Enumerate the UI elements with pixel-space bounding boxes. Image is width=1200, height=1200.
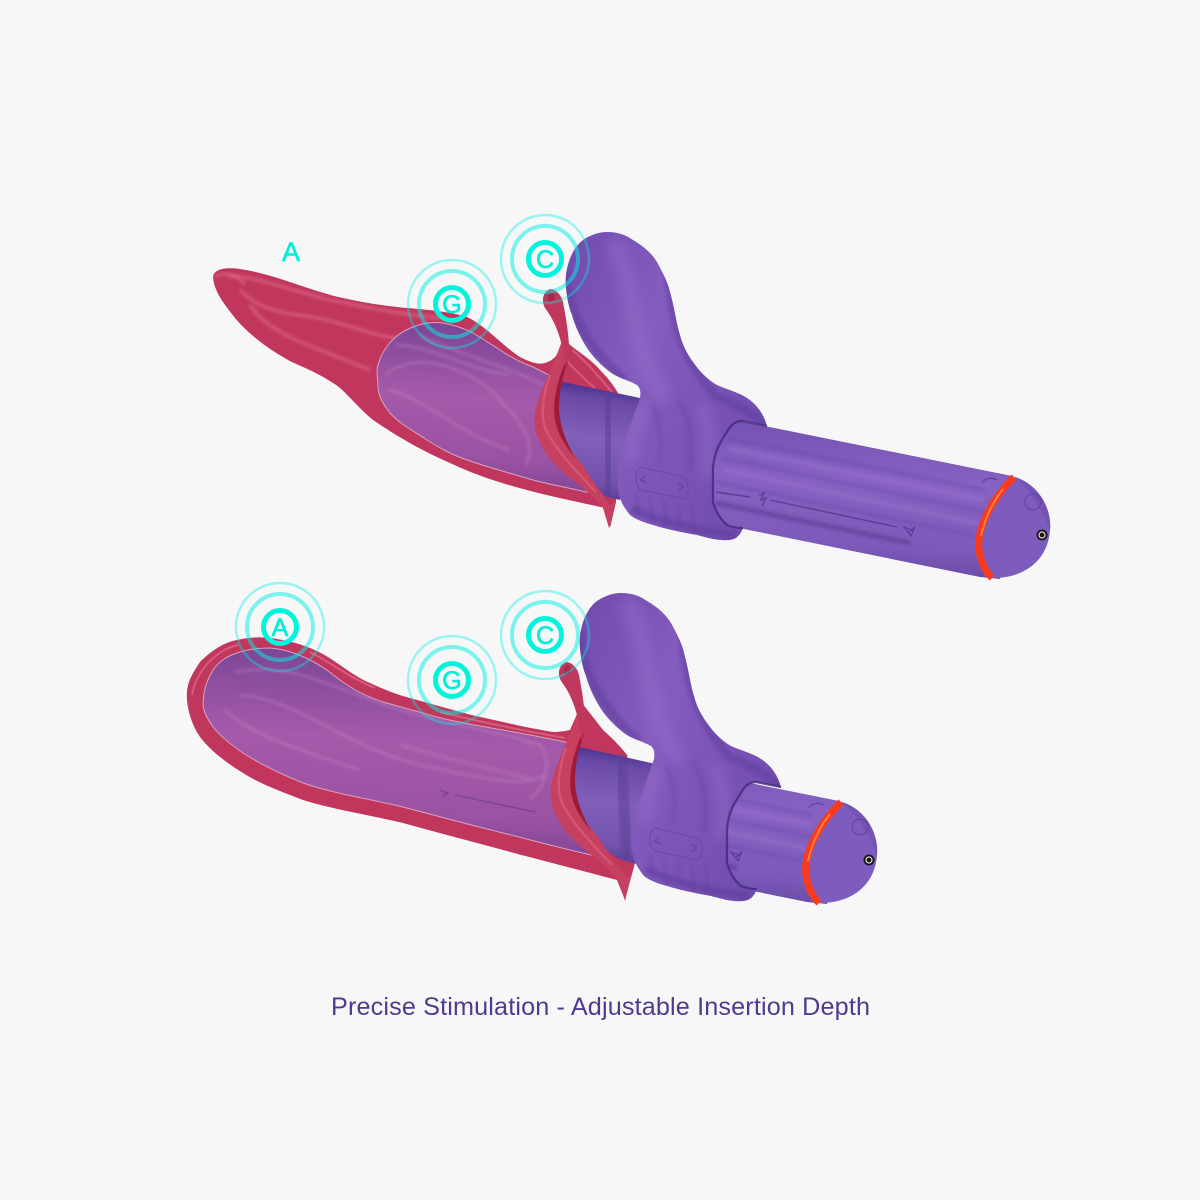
- insert head: top: [377, 322, 600, 495]
- target: C top: C: [536, 246, 554, 274]
- target: G bottom: [408, 636, 496, 724]
- target: G bottom: G: [442, 667, 462, 695]
- caption: Precise Stimulation - Adjustable Insertion Depth: [331, 993, 870, 1021]
- target: C bottom: [501, 591, 589, 679]
- sheath: bottom: [187, 637, 635, 900]
- target: A bottom: [236, 583, 324, 671]
- label: A plain, top: A: [282, 237, 300, 267]
- sheath: top: [213, 268, 618, 528]
- target: C top: [501, 215, 589, 303]
- silicone arm and ring: bottom: [580, 593, 781, 901]
- target: G top: [408, 260, 496, 348]
- infographic canvas: [186, 214, 1050, 1020]
- handle: top: [700, 413, 1050, 579]
- flap: top: [534, 289, 615, 528]
- handle: bottom: [727, 783, 878, 906]
- target: G top: G: [442, 291, 462, 319]
- inner shaft: bottom: [572, 746, 660, 865]
- flap: bottom: [550, 662, 631, 901]
- device illustration: shallow insertion (top): [213, 232, 1050, 579]
- target: C bottom: C: [536, 622, 554, 650]
- silicone arm and ring: top: [566, 232, 767, 540]
- device illustration: deep insertion (bottom): [187, 593, 877, 904]
- inner shaft: top: [555, 381, 640, 500]
- target: A bottom: A: [272, 614, 289, 642]
- insert head: bottom: [203, 648, 600, 857]
